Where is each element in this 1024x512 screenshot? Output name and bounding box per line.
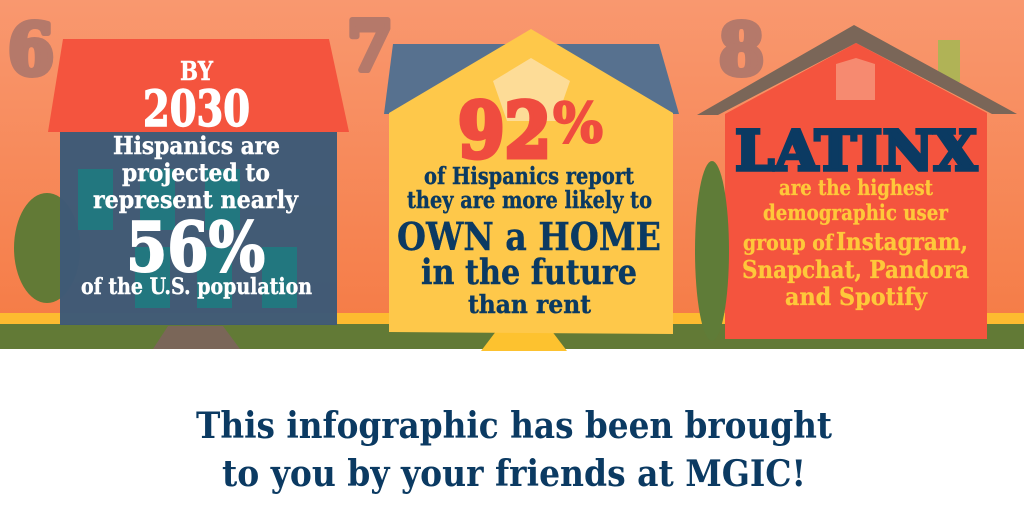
house 8 text — [742, 175, 969, 311]
house 7 text: in the future — [421, 252, 637, 293]
LATINX heading: LATINX — [735, 118, 977, 183]
yellow horizon band — [0, 313, 1024, 324]
closing message: to you by your friends at MGIC! — [222, 453, 806, 495]
house 7: yellow house with blue roof — [384, 29, 679, 351]
house 7 text: OWN a HOME — [397, 214, 661, 259]
house body — [725, 43, 987, 339]
house 7 text: than rent — [468, 290, 591, 319]
red roof — [48, 39, 349, 132]
door path — [481, 326, 567, 351]
brown roof — [697, 25, 1017, 115]
house 6 text: represent nearly — [93, 185, 299, 214]
house 8 text: are the highest — [779, 175, 933, 200]
house 6 text: projected to — [122, 158, 270, 187]
house 8 text: and Spotify — [785, 282, 928, 311]
house 7 text: they are more likely to — [407, 187, 652, 214]
house 7 statistic: 92 — [458, 86, 551, 175]
house 8: red house with brown roof — [695, 25, 1017, 341]
house 7 statistic: % — [553, 90, 603, 155]
chimney — [938, 40, 960, 82]
green ground — [0, 324, 1024, 349]
house 6 text: 2030 — [143, 79, 250, 138]
house 6 text: 56% — [126, 208, 265, 288]
house 8 text: demographic user — [763, 200, 949, 225]
house 7 text: of Hispanics report — [424, 163, 634, 190]
house 7 text — [397, 163, 661, 319]
house 6 text: BY — [180, 57, 213, 87]
house 6 text: of the U.S. population — [81, 274, 312, 300]
house 6 text: Hispanics are — [113, 131, 280, 160]
attic window — [493, 58, 570, 121]
attic window — [836, 58, 875, 100]
closing message: This infographic has been brought — [196, 405, 832, 447]
house 8 text: group of — [743, 230, 835, 255]
house body — [60, 132, 337, 325]
house 8 text: Snapchat, Pandora — [742, 255, 969, 284]
door path — [153, 326, 240, 349]
blue roof — [384, 44, 679, 114]
number 7: 7 — [347, 7, 393, 87]
house 6 text — [81, 57, 312, 300]
number 8: 8 — [719, 8, 764, 91]
tall tree — [695, 161, 729, 341]
windows — [78, 169, 297, 308]
tree left of house 6 — [14, 193, 80, 303]
number 6: 6 — [8, 8, 54, 91]
closing message — [196, 405, 832, 495]
house 8 text: Instagram, — [836, 227, 968, 256]
house body — [389, 29, 673, 334]
sunset sky background — [0, 0, 1024, 314]
house 6: blue house with red roof — [14, 39, 349, 349]
